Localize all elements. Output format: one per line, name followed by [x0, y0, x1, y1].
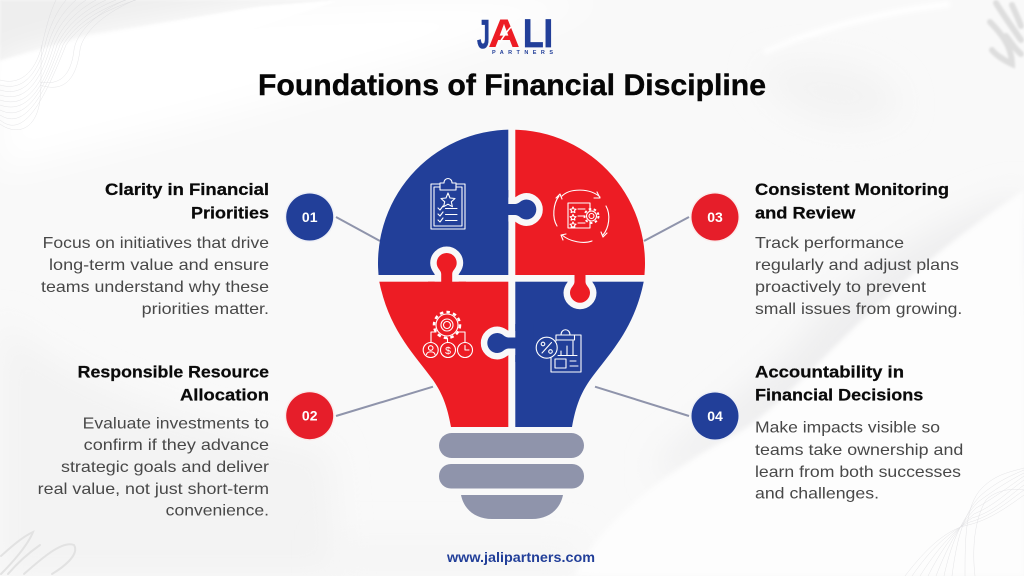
icon: review cycle with document and gear: [554, 190, 609, 242]
number badge 03: [690, 192, 740, 242]
text block: Clarity in Financial Priorities: long-term value and ensure: [49, 257, 269, 274]
text block: Consistent Monitoring and Review: and Review: [755, 204, 856, 223]
text block: Accountability in Financial Decisions: [755, 362, 963, 502]
decoration: top-left line wave: [0, 0, 136, 130]
text block: Responsible Resource Allocation: convenience.: [166, 503, 269, 520]
text block: Clarity in Financial Priorities: Priorities: [191, 204, 269, 223]
text block: Clarity in Financial Priorities: Clarity in Financial: [105, 180, 269, 199]
text block: Consistent Monitoring and Review: Consistent Monitoring: [755, 180, 949, 199]
number badge 02: 02: [302, 408, 318, 424]
icon: clipboard with percent and charts: [536, 330, 581, 372]
text block: Accountability in Financial Decisions: Accountability in: [755, 362, 904, 381]
text block: Responsible Resource Allocation: Responsible Resource: [78, 362, 269, 381]
connector lines: [336, 217, 689, 416]
logo: Jali Partners: PARTNERS: [492, 50, 553, 56]
decoration: bottom-left pen scribble: [1, 532, 75, 574]
decoration: bottom-right line wave: [905, 468, 1024, 576]
bulb base: [439, 433, 584, 519]
decoration: top-right brush scribble: [990, 3, 1021, 64]
number badge 01: [285, 192, 335, 242]
text block: Accountability in Financial Decisions: teams take ownership and: [755, 442, 963, 459]
text block: Responsible Resource Allocation: real value, not just short-term: [38, 481, 269, 498]
text block: Clarity in Financial Priorities: Focus on initiatives that drive: [43, 235, 269, 252]
text block: Responsible Resource Allocation: Allocation: [180, 386, 269, 405]
icon: clipboard with star and checklist: [431, 178, 465, 229]
number badge 02: [285, 391, 335, 441]
text block: Consistent Monitoring and Review: Track performance: [755, 235, 904, 252]
text block: Consistent Monitoring and Review: regularly and adjust plans: [755, 257, 959, 274]
text block: Responsible Resource Allocation: [38, 362, 270, 520]
text block: Accountability in Financial Decisions: learn from both successes: [755, 464, 961, 481]
title: Foundations of Financial Discipline: [258, 69, 766, 102]
text block: Consistent Monitoring and Review: small issues from growing.: [755, 301, 962, 318]
text block: Responsible Resource Allocation: strategic goals and deliver: [61, 459, 270, 476]
text block: Accountability in Financial Decisions: and challenges.: [755, 485, 879, 502]
logo: Jali Partners: LI: [523, 12, 553, 56]
logo: Jali Partners: [477, 11, 553, 57]
footer website: www.jalipartners.com: [446, 550, 595, 565]
number badge 03: 03: [707, 209, 723, 225]
text block: Responsible Resource Allocation: confirm if they advance: [84, 437, 269, 454]
text block: Clarity in Financial Priorities: [41, 180, 269, 318]
text block: Accountability in Financial Decisions: Financial Decisions: [755, 386, 923, 405]
text block: Accountability in Financial Decisions: Make impacts visible so: [755, 420, 940, 437]
text block: Clarity in Financial Priorities: teams understand why these: [41, 279, 269, 296]
number badge 04: 04: [707, 408, 723, 424]
text block: Consistent Monitoring and Review: proactively to prevent: [755, 279, 927, 296]
text block: Consistent Monitoring and Review: [755, 180, 962, 318]
logo: Jali Partners: J: [477, 11, 490, 57]
icon: gear allocating people, money and time: [423, 312, 472, 358]
icon: gear allocating people, money and time: $: [445, 345, 451, 357]
light bulb puzzle: [370, 120, 655, 519]
number badge 01: 01: [302, 209, 318, 225]
logo: Jali Partners: A: [488, 12, 520, 56]
text block: Responsible Resource Allocation: Evaluate investments to: [83, 415, 269, 432]
number badge 04: [690, 391, 740, 441]
text block: Clarity in Financial Priorities: priorities matter.: [142, 301, 269, 318]
bulb glass: four puzzle pieces: [378, 130, 645, 427]
